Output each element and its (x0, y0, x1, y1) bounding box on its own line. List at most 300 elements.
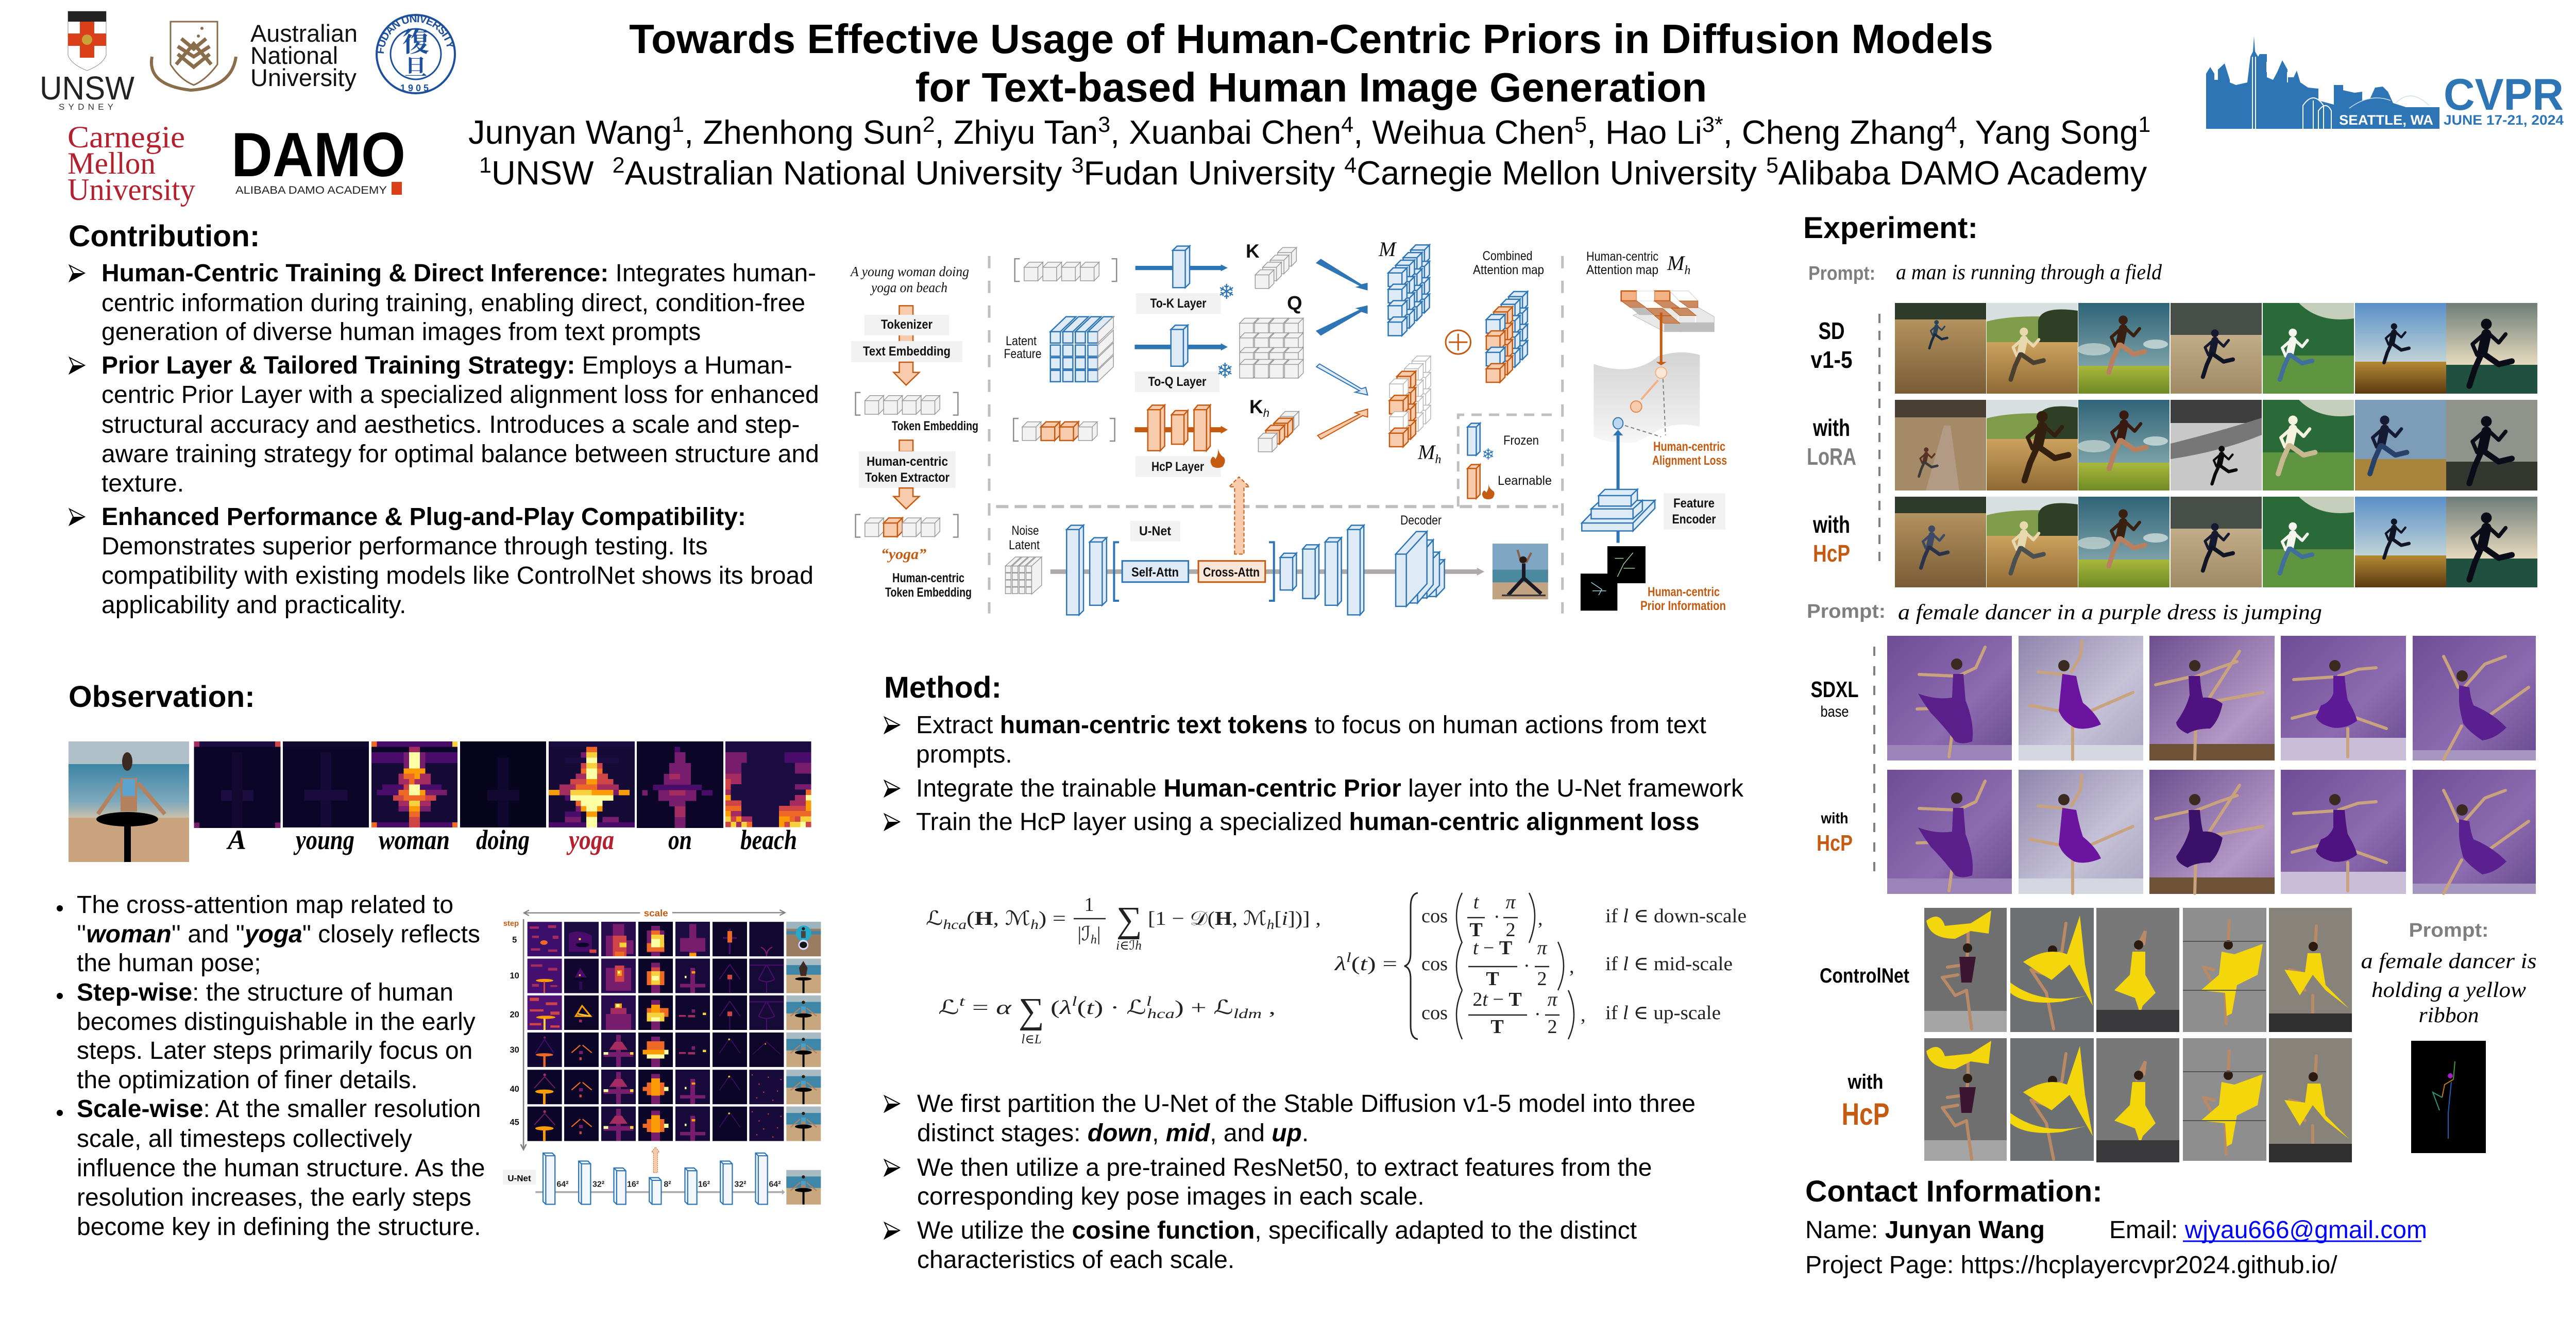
diagram labels: Attention map (1586, 263, 1658, 277)
text block: contribution bullets: applicability and practicality. (101, 591, 406, 619)
logo: Fudan University seal: 旦 (404, 49, 427, 82)
generated yoga photo (1493, 544, 1548, 599)
row labels: SDXL, HcP: SDXL (1810, 677, 1859, 702)
diagram labels: To-Q Layer (1148, 375, 1207, 389)
diagram labels: Human-centric (892, 571, 964, 585)
diagram labels: Prior Information (1640, 599, 1726, 613)
equation: alignment loss: h (1030, 917, 1039, 932)
text block: method details: corresponding key pose images in each scale. (917, 1183, 1425, 1210)
To-K branch (1015, 246, 1368, 335)
diagram labels: ❄ (1482, 446, 1495, 464)
equation: total loss: = (965, 997, 996, 1019)
heading: Contribution: Contribution: (69, 219, 260, 253)
equation: cosine schedule: T (1469, 919, 1483, 941)
text block: observation bullets: the human pose; (77, 950, 261, 977)
prompt: purple dancer: Prompt: (1807, 601, 1886, 622)
diagram labels: A young woman doing (850, 264, 969, 279)
U-Net encoder blocks (1050, 521, 1484, 615)
text block: observation bullets: influence the human structure. As the (77, 1155, 485, 1182)
equation: total loss (938, 991, 1276, 1046)
text block: method details: We first partition the U-Net of the Stable Diffusion v1-5 model into three (917, 1090, 1696, 1118)
authors: , Hao Li (1587, 113, 1702, 151)
equation: cosine schedule: ( (1351, 953, 1360, 975)
logo: Australian National University: University (250, 64, 357, 91)
equation: alignment loss: | (1097, 923, 1101, 945)
equation: cosine schedule: π (1537, 937, 1547, 959)
equation: cosine schedule: 2 (1505, 919, 1516, 941)
plus symbol (1446, 330, 1471, 354)
affiliations: 5 (1766, 153, 1778, 178)
diagram labels: Learnable (1498, 474, 1552, 488)
logo: CVPR 2024 Seattle: CVPR (2444, 70, 2564, 120)
panel: Contact Information (1805, 1175, 2427, 1279)
text block: contribution bullets: centric information during training, enabling direct, condition-free (101, 290, 805, 317)
prompt: yellow ribbon: a female dancer is (2361, 950, 2537, 973)
scale axis (524, 907, 785, 918)
human-centric attention map stack (1621, 291, 1714, 332)
authors: , Cheng Zhang (1723, 113, 1945, 151)
equation: cosine schedule: , (1581, 1004, 1586, 1026)
attention map Mh grid (1389, 356, 1431, 447)
heading: Contact Information: Contact Information: (1805, 1175, 2103, 1208)
authors: 1 (2138, 112, 2150, 137)
step axis (503, 919, 526, 1149)
affiliations: Fudan University (1084, 154, 1344, 192)
text block: observation bullets: ''woman'' and "yoga" closely reflects (77, 921, 480, 948)
contact details (1805, 1216, 2427, 1279)
affiliations: UNSW (492, 154, 613, 192)
diagram labels: To-K Layer (1150, 296, 1207, 311)
U-Net strip: 16² (627, 1179, 639, 1189)
diagram labels: Latent (1009, 538, 1040, 552)
token labels: doing (476, 824, 530, 855)
U-Net strip: 64² (556, 1179, 569, 1189)
equation: cosine schedule: t − T (1473, 937, 1512, 959)
text block: contribution bullets: structural accuracy and aesthetics. Introduces a scale and step- (101, 411, 800, 438)
equation: cosine schedule: , (1569, 956, 1574, 977)
diagram labels: Frozen (1503, 433, 1539, 448)
text block: contribution bullets (70, 260, 819, 619)
text block: method bullets: Integrate the trainable Human-centric Prior layer into the U-Net framework (916, 775, 1744, 802)
step axis: 5 (512, 935, 517, 944)
heatmap: doing (460, 741, 546, 827)
prompt: purple dancer: a female dancer in a purple dress is jumping (1898, 601, 2322, 624)
text block: observation bullets: resolution increases, the early steps (77, 1184, 471, 1211)
equation: alignment loss: h (1267, 917, 1274, 932)
equation: cosine schedule: · (1534, 1004, 1541, 1025)
attention map M grid (1388, 245, 1430, 335)
diagram labels: Token Embedding (892, 419, 978, 433)
token labels: on (668, 824, 692, 855)
heading: Experiment: Experiment: (1803, 211, 1978, 245)
logo: Carnegie Mellon University: Carnegie (67, 120, 185, 154)
equation: total loss: ldm (1233, 1006, 1262, 1021)
text block: observation bullets: steps. Later steps primarily focus on (77, 1037, 472, 1064)
text block: method details: We then utilize a pre-trained ResNet50, to extract features from the (917, 1154, 1652, 1181)
logo: Alibaba DAMO Academy: ALIBABA DAMO ACADEMY (235, 184, 387, 196)
text block: contribution bullets: aware training strategy for optimal balance between structure and (101, 441, 819, 468)
decoder fan (1396, 532, 1445, 606)
diagram labels: Attention map (1473, 263, 1544, 277)
row labels: SD, LoRA, HcP: v1-5 (1810, 346, 1853, 373)
logo: UNSW Sydney: UNSW (40, 70, 135, 107)
diagram labels: Text Embedding (863, 344, 951, 359)
diagram labels: Feature (1004, 347, 1042, 361)
step axis: 20 (510, 1010, 519, 1019)
HcP branch (1013, 405, 1368, 477)
row labels: SD, LoRA, HcP (1807, 314, 1879, 569)
diagram labels: Tokenizer (881, 317, 933, 332)
equation: cosine schedule: if l ∈ up-scale (1605, 1002, 1721, 1024)
image row: SDXL base (1887, 636, 2536, 760)
equation: cosine schedule: if l ∈ down-scale (1605, 905, 1747, 927)
text block: observation bullets: Step-wise: the structure of human (77, 979, 453, 1006)
equation: alignment loss: ( (967, 908, 974, 929)
affiliations: 1 (479, 153, 492, 178)
title: Towards Effective Usage of Human-Centric Priors in Diffusion Models (629, 16, 1993, 62)
equation: cosine schedule: λ (1334, 953, 1346, 975)
combined attention map grid (1486, 292, 1528, 382)
diagram labels: Alignment Loss (1652, 453, 1727, 468)
diagram labels: Human-centric (1653, 439, 1725, 454)
token labels: woman (379, 824, 450, 855)
prompt: yellow ribbon: Prompt: (2409, 920, 2488, 941)
authors: 3 (1098, 112, 1110, 137)
logo: Alibaba DAMO Academy: DAMO (231, 120, 405, 190)
pose skeleton image (2411, 1041, 2486, 1153)
authors: 4 (1341, 112, 1353, 137)
equation: total loss: t) · ℒ (1086, 997, 1131, 1019)
authors: 3* (1702, 112, 1723, 137)
diagram labels (850, 238, 1727, 613)
token labels: A (226, 824, 246, 855)
text block: method bullets: Train the HcP layer using a specialized human-centric alignment loss (916, 808, 1700, 836)
equation: total loss: ( (1077, 997, 1086, 1019)
heading: Method: Method: (884, 671, 1002, 704)
prompt: running man: a man is running through a field (1896, 261, 2162, 284)
heatmap: on (637, 741, 723, 828)
logo: CVPR 2024 Seattle (2206, 36, 2564, 129)
diagram labels: M (1418, 441, 1435, 464)
equation: cosine schedule: , (1538, 908, 1543, 929)
panel: Contribution (69, 219, 819, 619)
row labels: SD, LoRA, HcP: LoRA (1807, 443, 1856, 470)
diagram labels: Decoder (1400, 513, 1442, 528)
logo: Carnegie Mellon University (67, 120, 195, 207)
image row: ControlNet (1924, 908, 2352, 1032)
affiliations: Australian National University (625, 154, 1072, 192)
equation: alignment loss: hca (943, 917, 967, 932)
image row: SDXL with HcP (1887, 770, 2536, 894)
token labels: young (293, 824, 354, 855)
contact details: Name: Junyan Wang (1805, 1216, 2045, 1244)
panel: Method (884, 671, 1747, 1274)
row labels: SDXL, HcP (1810, 647, 1874, 881)
diagram labels: K (1246, 241, 1260, 262)
equation: alignment loss: ℒ (926, 908, 940, 929)
token labels: yoga (566, 824, 614, 855)
text block: method details (885, 1090, 1696, 1274)
prompt: yellow ribbon (2361, 920, 2537, 1027)
diagram labels: Combined (1483, 249, 1532, 263)
image row: with LoRA (1895, 400, 2537, 491)
equation: cosine schedule: π (1547, 989, 1557, 1010)
diagram labels: M (1667, 251, 1684, 275)
row labels: ControlNet, HcP (1820, 965, 1909, 1131)
U-Net decoder blocks (1280, 526, 1364, 615)
heatmap: A (194, 741, 280, 828)
diagram labels: Feature (1673, 496, 1715, 511)
row labels: SD, LoRA, HcP: with (1812, 414, 1850, 441)
equation: alignment loss: 1 (1084, 894, 1094, 916)
diagram labels: yoga on beach (870, 280, 947, 295)
orange upward arrow (652, 1147, 659, 1173)
row labels: ControlNet, HcP: with (1848, 1071, 1884, 1093)
panel: Observation (57, 680, 821, 1241)
logo: Carnegie Mellon University: University (67, 173, 195, 207)
text block: method details: distinct stages: down, mid, and up. (917, 1120, 1309, 1147)
equation: cosine schedule: 2t − T (1472, 989, 1522, 1010)
prompt: yellow ribbon: holding a yellow (2371, 978, 2526, 1002)
text block: observation bullets: scale, all timesteps collectively (77, 1125, 412, 1153)
equation: alignment loss: [1 − 𝒟( H, ℳ (1148, 908, 1263, 929)
contact details: Project Page: https://hcplayercvpr2024.github.io/ (1805, 1252, 2337, 1279)
heatmap: beach (725, 741, 811, 827)
text block: observation bullets: become key in defining the structure. (77, 1213, 481, 1241)
text block: contribution bullets: Prior Layer & Tailored Training Strategy: Employs a Human- (101, 352, 792, 379)
text block: method bullets: Extract human-centric text tokens to focus on human actions from text (916, 712, 1706, 739)
diagram labels: HcP Layer (1151, 460, 1204, 474)
noise latent cube (1006, 557, 1042, 594)
latent feature cube (1050, 317, 1113, 382)
authors: , Zhiyu Tan (935, 113, 1098, 151)
text block: observation bullets (57, 891, 485, 1241)
row labels: SD, LoRA, HcP: SD (1819, 317, 1844, 344)
row labels: SDXL, HcP: HcP (1817, 831, 1853, 856)
diagram labels: Q (1287, 293, 1302, 314)
equation: alignment loss: [ (1274, 908, 1282, 929)
diagram labels: “yoga” (881, 546, 926, 563)
text block: method details: characteristics of each scale. (917, 1246, 1234, 1274)
equation: total loss: l∈L (1021, 1033, 1042, 1046)
U-Net strip: 8² (664, 1179, 671, 1189)
U-Net strip: 32² (734, 1179, 747, 1189)
U-Net strip: U-Net (507, 1173, 531, 1183)
equation: alignment loss: ) = (1039, 908, 1066, 929)
equation: cosine schedule: t (1473, 891, 1480, 913)
diagram labels: h (1263, 407, 1269, 419)
equation: cosine schedule: if l ∈ mid-scale (1605, 953, 1733, 975)
panel: Experiment (1803, 211, 2537, 1162)
feature encoder pyramid (1582, 489, 1725, 531)
equation: cosine schedule: t) = (1360, 953, 1389, 975)
U-Net strip: 64² (769, 1179, 781, 1189)
text block: method details: We utilize the cosine function, specifically adapted to the distinct (917, 1217, 1637, 1244)
equation: alignment loss (926, 894, 1321, 953)
equation: cosine schedule: l (1346, 950, 1351, 965)
logo: Fudan University seal: 復 (402, 21, 429, 59)
step axis: 10 (510, 971, 519, 980)
authors: Junyan Wang (468, 113, 672, 151)
authors: , Yang Song (1957, 113, 2138, 151)
equation: total loss: hca (1147, 1006, 1175, 1021)
row labels: SDXL, HcP: with (1821, 810, 1849, 827)
token labels: beach (740, 824, 797, 855)
diagram labels: Human-centric (867, 454, 948, 469)
equation: total loss: (λ (1050, 997, 1068, 1019)
equation: total loss: ℒ (938, 997, 952, 1019)
diagram dividers and shapes (851, 245, 1725, 615)
authors: , Weihua Chen (1353, 113, 1574, 151)
logo: Fudan University seal: 1905 (400, 83, 431, 93)
equation: cosine schedule: cos (1421, 905, 1448, 927)
equation: total loss: , (1262, 997, 1276, 1019)
equation: total loss: ) + ℒ (1175, 997, 1233, 1019)
equation: alignment loss: H, ℳ (974, 908, 1024, 929)
diagram labels: Human-centric (1648, 585, 1720, 599)
text block: observation bullets: the optimization of finer details. (77, 1067, 418, 1094)
text pipeline column (851, 306, 962, 537)
diagram labels: ❄ (1216, 359, 1234, 383)
equation: alignment loss: ∑ (1116, 900, 1142, 940)
step axis: 30 (510, 1045, 519, 1055)
equation: cosine schedule: cos (1421, 1002, 1448, 1024)
equation: cosine schedule (1334, 891, 1747, 1039)
affiliations: Carnegie Mellon University (1357, 154, 1766, 192)
logo: Australian National University (151, 20, 358, 91)
heatmap: young (283, 741, 369, 827)
equation: cosine schedule: 2 (1537, 968, 1547, 990)
prompt: yellow ribbon: ribbon (2418, 1004, 2479, 1027)
text block: contribution bullets: Demonstrates superior performance through testing. Its (101, 533, 708, 560)
image row: SD v1-5 (1895, 303, 2537, 394)
text block: contribution bullets: Human-Centric Training & Direct Inference: Integrates human- (101, 260, 816, 287)
row labels: ControlNet, HcP: ControlNet (1820, 965, 1909, 987)
panel: HcP architecture diagram (850, 238, 1727, 615)
text block: observation bullets: The cross-attention map related to (77, 891, 453, 919)
scale axis: scale (644, 907, 668, 918)
dashed feature arrow (1229, 477, 1249, 554)
title (629, 16, 1993, 110)
logo: UNSW Sydney (40, 11, 135, 112)
logo: CVPR 2024 Seattle: JUNE 17-21, 2024 (2444, 112, 2564, 128)
diagram labels: K (1249, 396, 1263, 417)
equation: alignment loss: |ℐ (1077, 923, 1091, 945)
equation: cosine schedule: · (1494, 906, 1500, 928)
text block: contribution bullets: compatibility with existing models like ControlNet shows its broad (101, 562, 814, 589)
logo: Australian National University: National (250, 42, 338, 69)
diagram labels: Self-Attn (1131, 565, 1179, 580)
diagram labels: Token Embedding (885, 585, 972, 600)
authors: , Zhenhong Sun (684, 113, 923, 151)
authors: 1 (672, 112, 684, 137)
authors: , Xuanbai Chen (1110, 113, 1341, 151)
diagram labels: Noise (1012, 523, 1039, 538)
text block: observation bullets: Scale-wise: At the smaller resolution (77, 1095, 481, 1123)
equation: total loss: l (1072, 994, 1077, 1009)
equation: cosine schedule: · (1523, 955, 1530, 977)
logo: UNSW Sydney: SYDNEY (59, 102, 113, 112)
affiliations: 4 (1344, 153, 1357, 178)
logo: Australian National University: Australian (250, 20, 358, 47)
step axis: 45 (510, 1118, 519, 1127)
image row: ControlNet with HcP (1924, 1038, 2352, 1162)
text block: method bullets: prompts. (916, 741, 1012, 768)
pose prior images (1581, 546, 1646, 611)
authors: 2 (923, 112, 935, 137)
heading: Observation: Observation: (69, 680, 255, 714)
text block: observation bullets: becomes distinguishable in the early (77, 1008, 476, 1036)
image row: with HcP (1895, 497, 2537, 587)
equation: alignment loss: i])] , (1282, 908, 1317, 929)
equation: total loss: t (959, 994, 965, 1009)
diagram labels: Token Extractor (865, 470, 950, 485)
U-Net strip: 16² (698, 1179, 710, 1189)
equation: cosine schedule: T (1486, 968, 1499, 990)
equation: cosine schedule: π (1505, 891, 1516, 913)
logo: Fudan University seal: FUDAN UNIVERSITY (378, 16, 453, 54)
logo: Fudan University seal (376, 14, 456, 94)
prompt: running man: Prompt: (1808, 263, 1875, 284)
text block: contribution bullets: texture. (101, 470, 184, 497)
yoga photo (69, 741, 189, 862)
step axis: step (503, 920, 519, 928)
authors: 5 (1574, 112, 1587, 137)
contact details: Email: wjyau666@gmail.com (2109, 1216, 2427, 1244)
text block: contribution bullets: generation of diverse human images from text prompts (101, 318, 701, 346)
equation: total loss: ∑ (1019, 991, 1044, 1031)
U-Net strip (503, 1153, 821, 1205)
logo: Carnegie Mellon University: Mellon (67, 146, 156, 180)
alignment manifold surface (1594, 312, 1700, 543)
U-Net strip: 32² (592, 1179, 605, 1189)
equation: alignment loss: i∈ℐh (1116, 939, 1142, 953)
attention map grid (528, 922, 821, 1141)
equation: cosine schedule: T (1490, 1016, 1504, 1038)
diagram labels: h (1435, 453, 1441, 466)
To-Q branch and Q grid (1134, 318, 1368, 395)
equation: total loss: α (996, 997, 1012, 1019)
diagram labels: Cross-Attn (1203, 565, 1260, 580)
equation: cosine schedule: 2 (1548, 1016, 1557, 1038)
row labels: SDXL, HcP: base (1821, 703, 1849, 720)
diagram labels: Latent (1006, 334, 1037, 348)
heatmap: woman (371, 741, 457, 827)
text block: method bullets (885, 712, 1744, 836)
heatmap: yoga (549, 741, 635, 827)
row labels: SD, LoRA, HcP: HcP (1813, 540, 1850, 567)
text block: contribution bullets: Enhanced Performance & Plug-and-Play Compatibility: (101, 503, 746, 531)
diagram labels: Encoder (1672, 512, 1716, 527)
chart: step and scale attention grid with U-Net (503, 907, 821, 1205)
authors: 4 (1945, 112, 1957, 137)
step axis: 40 (510, 1085, 519, 1094)
affiliations: 2 (613, 153, 625, 178)
row labels: ControlNet, HcP: HcP (1841, 1097, 1890, 1131)
diagram labels: h (1684, 264, 1690, 277)
title: for Text-based Human Image Generation (916, 64, 1707, 110)
diagram labels: U-Net (1139, 524, 1172, 538)
token labels (226, 824, 797, 855)
legend blocks (1467, 424, 1495, 499)
affiliations: Alibaba DAMO Academy (1778, 154, 2147, 192)
row labels: SD, LoRA, HcP: with (1812, 511, 1850, 538)
logo: CVPR 2024 Seattle: SEATTLE, WA (2339, 112, 2433, 128)
affiliations: 3 (1072, 153, 1084, 178)
equation: cosine schedule: cos (1421, 953, 1448, 975)
text block: contribution bullets: centric Prior Layer with a specialized alignment loss for enhanced (101, 381, 819, 409)
diagram labels: ❄ (1218, 280, 1235, 304)
